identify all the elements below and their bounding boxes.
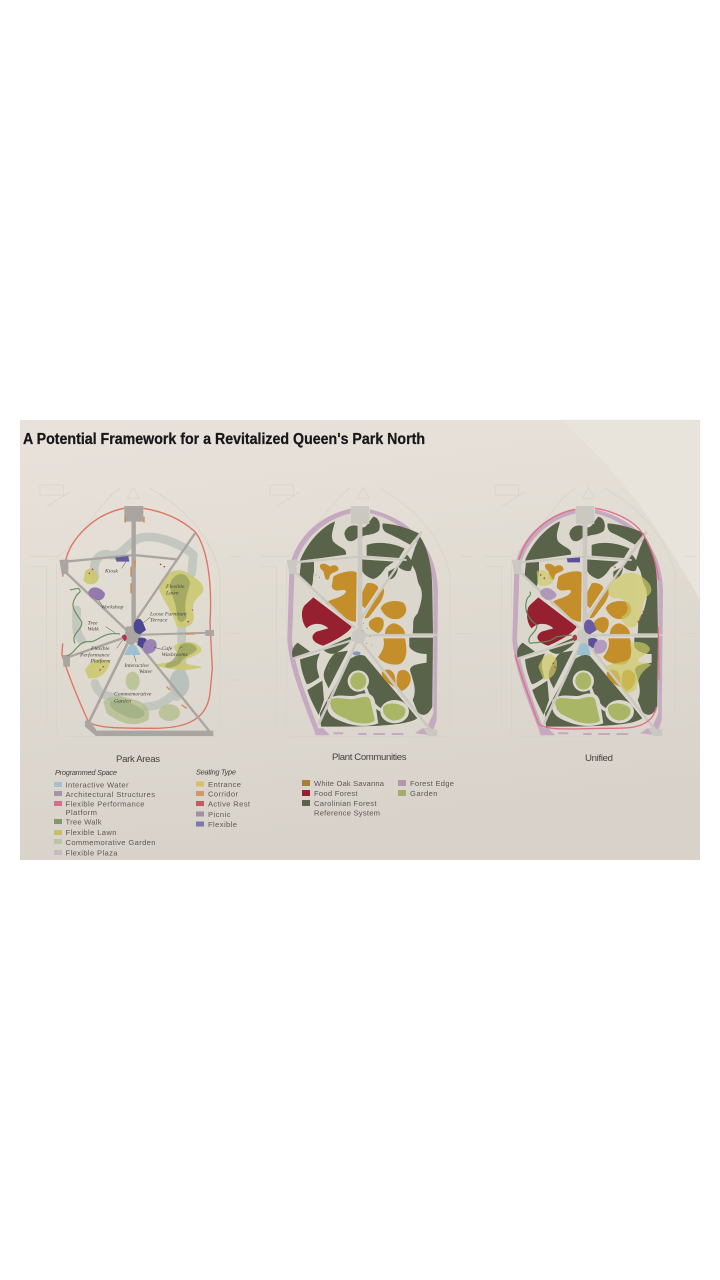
flexible plaza paths	[76, 537, 193, 707]
legend: plant communities: Reference System	[314, 808, 380, 818]
map labels: Walk	[88, 627, 99, 633]
legend: plant communities	[302, 779, 454, 818]
architectural and seating shapes	[88, 556, 157, 655]
map labels: Washrooms	[162, 652, 188, 658]
map labels: Commemorative	[114, 692, 152, 698]
picnic dots	[88, 563, 193, 671]
map labels: Performance	[79, 651, 110, 658]
corridor seating ticks	[125, 517, 195, 708]
legend: programmed space: Tree Walk	[66, 818, 102, 826]
commemorative garden	[103, 672, 180, 724]
map: park areas	[30, 485, 242, 737]
legend: seating type: Flexible	[208, 820, 237, 829]
paths and spokes	[63, 517, 213, 734]
unified lawn overlays	[537, 570, 651, 693]
legend: programmed space: Architectural Structures	[66, 790, 155, 799]
legend: plant communities: Food Forest	[314, 789, 358, 798]
map labels: Workshop	[101, 604, 124, 610]
legend: seating type	[196, 768, 251, 829]
legend: seating type: Picnic	[208, 810, 231, 819]
legend: plant communities: White Oak Savanna	[314, 779, 385, 788]
flexible lawns	[83, 569, 203, 679]
unified park outline	[515, 508, 659, 729]
map labels: Loose Furniture	[149, 611, 187, 617]
legend: programmed space: Flexible Performance	[66, 800, 144, 808]
park outline	[62, 508, 212, 728]
legend: plant communities: Carolinian Forest	[314, 799, 377, 808]
map labels: Flexible	[165, 584, 185, 590]
map labels: Water	[139, 669, 153, 675]
unified tree walk	[526, 592, 572, 643]
map labels: Platform	[89, 657, 110, 664]
map labels: Interactive	[123, 663, 149, 669]
unified seating shapes	[540, 557, 607, 655]
legend: seating type: Entrance	[208, 780, 241, 789]
map labels: Lawn	[165, 590, 179, 596]
legend: programmed space: Commemorative Garden	[66, 838, 156, 847]
legend: programmed space: Interactive Water	[66, 780, 129, 790]
legend: programmed space: Platform	[66, 808, 97, 817]
legend: programmed space: Programmed Space	[55, 768, 117, 777]
map labels: Terrace	[150, 618, 168, 624]
map labels	[79, 569, 188, 704]
caption: plant communities: Plant Communities	[332, 752, 407, 763]
caption: unified: Unified	[585, 753, 613, 764]
legend: seating type: Active Rest	[208, 800, 251, 808]
map labels: Flexible	[90, 646, 110, 652]
caption: park areas: Park Areas	[116, 754, 160, 765]
legend: programmed space: Flexible Lawn	[66, 828, 116, 837]
title: A Potential Framework for a Revitalized Queen's Park North	[23, 431, 425, 448]
legend: plant communities: Forest Edge	[410, 779, 454, 788]
map labels: Cafe	[162, 645, 173, 652]
legend: plant communities: Garden	[410, 789, 438, 798]
map: unified	[485, 485, 697, 737]
map labels: Kiosk	[104, 569, 118, 575]
background paper sheet	[20, 420, 700, 860]
map: plant communities	[260, 485, 472, 737]
label leader arrows	[98, 562, 183, 662]
legend: seating type: Corridor	[208, 790, 238, 798]
legend: seating type: Seating Type	[196, 768, 236, 776]
legend: programmed space: Flexible Plaza	[66, 848, 118, 858]
map labels: Garden	[114, 698, 131, 704]
tree walk	[67, 588, 120, 656]
legend: programmed space	[54, 768, 156, 858]
map labels: Tree	[88, 621, 98, 627]
